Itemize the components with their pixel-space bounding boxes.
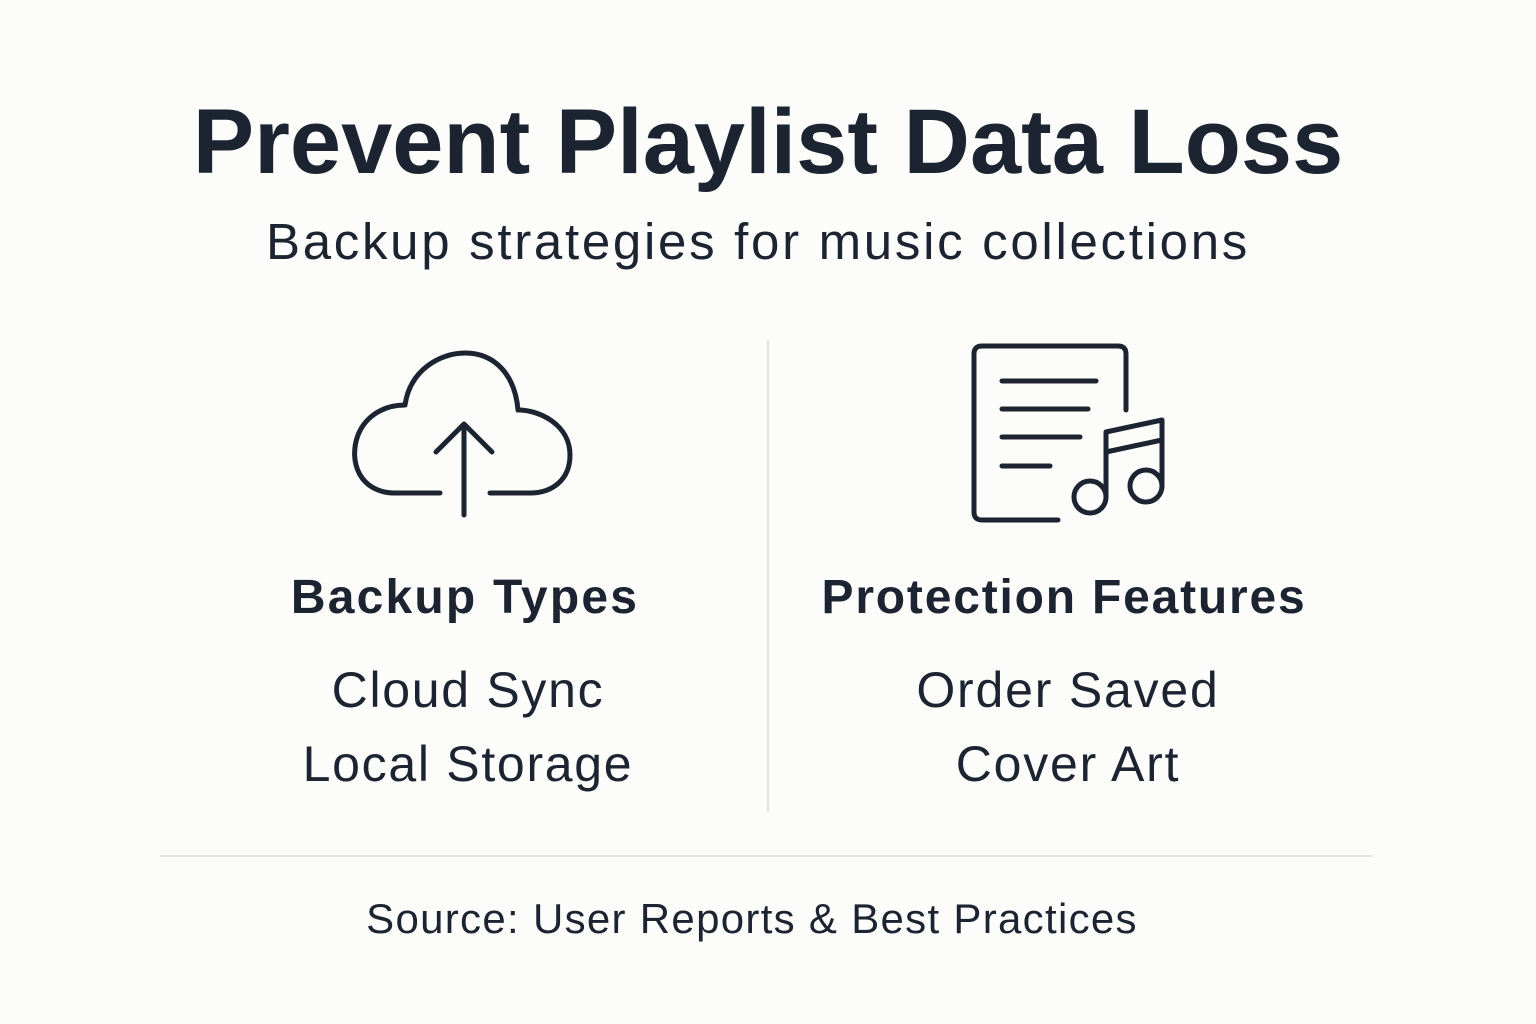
list: backup types: Local Storage (303, 736, 633, 792)
subtitle: Backup strategies for music collections (266, 213, 1250, 270)
list: protection features: Cover Art (956, 736, 1180, 792)
divider vertical (767, 340, 769, 812)
list: backup types: Cloud Sync (332, 662, 604, 718)
heading: protection features: Protection Features (822, 571, 1306, 624)
list: protection features (916, 662, 1220, 792)
divider horizontal (160, 855, 1372, 857)
source note: Source: User Reports & Best Practices (366, 895, 1138, 942)
heading: backup types: Backup Types (291, 571, 639, 624)
title: Prevent Playlist Data Loss (193, 91, 1343, 193)
panel: protection features (822, 344, 1306, 792)
list: backup types (303, 662, 633, 792)
list: protection features: Order Saved (916, 662, 1220, 718)
icon: document with music note (972, 344, 1164, 522)
icon: cloud upload (352, 350, 572, 518)
panel: backup types (291, 350, 639, 792)
